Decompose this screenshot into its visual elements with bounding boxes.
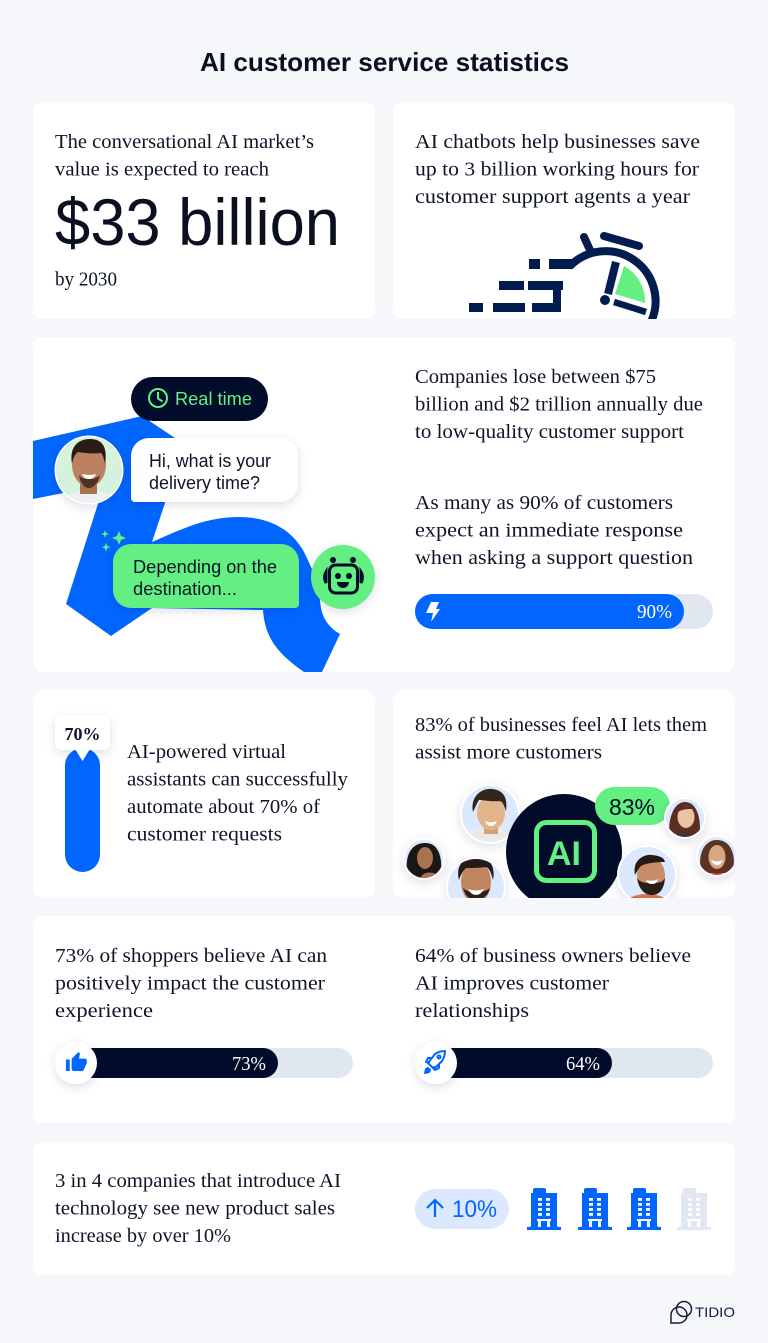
text: 83% of businesses — [415, 714, 707, 764]
progress bar: 73% — [55, 1042, 353, 1084]
text: owners belief: AI improves customer — [415, 972, 609, 994]
text: virtual assistants: customer requests — [127, 824, 282, 846]
text: product sales: technology see new product sales — [55, 1198, 335, 1220]
text: product sales — [55, 1170, 341, 1247]
text: virtual assistants: assistants can successfully — [127, 768, 349, 790]
badge: 83%: 83% — [609, 794, 655, 820]
avatar: woman left — [403, 838, 445, 880]
text: losses: Companies lose between $75 — [415, 366, 656, 388]
text: immediate response: when asking a support question — [415, 547, 693, 569]
text: shoppers belief: 73% of shoppers believe AI can — [55, 945, 327, 967]
icon: sparkles — [101, 530, 126, 551]
gauge: 70% — [55, 716, 110, 872]
chat bubble: bot reply — [113, 544, 299, 608]
text: market intro — [55, 131, 314, 180]
text: immediate response — [415, 492, 693, 569]
chat bubble: bot reply: Depending on the — [133, 557, 277, 577]
text: losses — [415, 366, 703, 443]
text: 83% of businesses: assist more customers — [415, 742, 602, 764]
logo: Tidio: TIDIO — [695, 1304, 735, 1320]
icon: AI badge — [506, 794, 622, 898]
text: chatbots save hours: AI chatbots help businesses save — [415, 131, 700, 153]
avatar: man top — [460, 784, 520, 844]
text: losses: to low-quality customer support — [415, 421, 684, 443]
text: chatbots save hours — [415, 131, 700, 208]
illustration: blue ribbon — [33, 416, 340, 672]
icon: rocket — [415, 1042, 457, 1084]
text: market intro: The conversational AI market’s — [55, 131, 314, 153]
avatar: customer — [54, 436, 124, 504]
text: virtual assistants — [127, 741, 349, 846]
chat bubble: customer question: delivery time? — [149, 473, 260, 493]
icon: AI badge: AI — [547, 835, 581, 873]
icon: stopwatch — [469, 236, 656, 322]
icon: up arrow — [427, 1200, 443, 1217]
value: 90% — [637, 601, 672, 623]
text: product sales: 3 in 4 companies that introduce AI — [55, 1170, 341, 1192]
badge: up 10% — [415, 1189, 509, 1229]
progress bar: 90% — [415, 594, 713, 629]
text: chatbots save hours: up to 3 billion working hours for — [415, 158, 699, 180]
text: virtual assistants: automate about 70% of — [127, 796, 320, 818]
badge: 83% — [595, 787, 670, 825]
icon: lightning bolt — [426, 602, 440, 622]
progress bar: 64% — [415, 1042, 713, 1084]
gauge: 70%: 70% — [64, 724, 100, 744]
panel: new product sales — [33, 1142, 735, 1275]
title: AI customer service statistics — [200, 47, 569, 77]
avatar: man bottom left — [443, 859, 509, 898]
text: 83% of businesses: 83% of businesses feel AI lets them — [415, 714, 707, 736]
value: 64% — [566, 1053, 600, 1075]
text: virtual assistants: AI-powered virtual — [127, 741, 286, 763]
panel: shoppers and owners — [33, 916, 735, 1123]
text: losses: billion and $2 trillion annually due — [415, 394, 703, 416]
label text: Real time — [175, 389, 252, 409]
text: shoppers belief: experience — [55, 1000, 153, 1022]
avatar: man bottom right — [617, 845, 677, 905]
panel: working hours saved — [393, 102, 735, 322]
panel: real-time support — [33, 337, 735, 672]
icon: thumbs up — [55, 1042, 97, 1084]
icon: robot — [311, 545, 375, 609]
avatar: woman top right — [664, 797, 706, 839]
icon: clock — [149, 389, 167, 407]
avatar: woman far right — [696, 835, 738, 877]
badge: up 10%: 10% — [452, 1196, 497, 1223]
text: market intro: value is expected to reach — [55, 158, 269, 180]
logo: Tidio — [671, 1302, 735, 1323]
chat label: real time — [131, 377, 268, 421]
chat bubble: customer question — [131, 438, 298, 502]
illustration: people around AI — [400, 786, 735, 898]
text: product sales: increase by over 10% — [55, 1225, 231, 1247]
icons: buildings, three of four — [527, 1188, 711, 1230]
value: 73% — [232, 1053, 266, 1075]
text: owners belief: 64% of business owners believe — [415, 945, 691, 967]
panel: assist more customers — [393, 690, 738, 917]
text: immediate response: expect an immediate response — [415, 520, 683, 542]
text: chatbots save hours: customer support agents a year — [415, 186, 690, 208]
text: shoppers belief: positively impact the customer — [55, 972, 325, 994]
text: owners belief — [415, 945, 691, 1022]
text: shoppers belief — [55, 945, 327, 1022]
chat bubble: customer question: Hi, what is your — [149, 451, 271, 471]
text: owners belief: relationships — [415, 1000, 529, 1022]
panel: market value — [33, 102, 375, 319]
panel: automation 70% — [33, 690, 375, 898]
big number: $33 billion: $33 billion — [55, 185, 340, 259]
chat bubble: bot reply: destination... — [133, 579, 237, 599]
text: by 2030: by 2030 — [55, 268, 117, 290]
text: immediate response: As many as 90% of customers — [415, 492, 673, 514]
